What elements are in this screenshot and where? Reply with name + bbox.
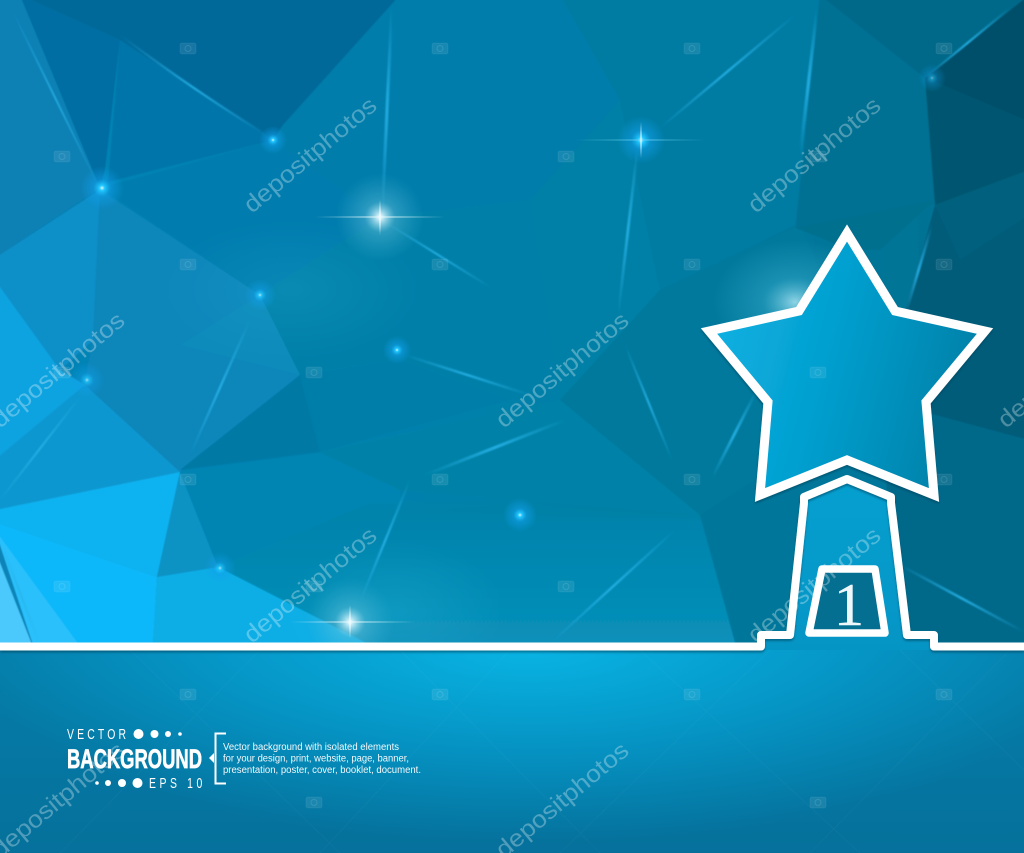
vector label: VECTOR xyxy=(67,726,126,742)
light beams xyxy=(0,8,1024,645)
description: presentation, poster, cover, booklet, document. xyxy=(223,765,421,776)
top dots xyxy=(134,729,182,739)
background heading: BACKGROUND xyxy=(67,744,202,774)
glow behind star xyxy=(713,240,877,364)
watermark text: depositphotos xyxy=(743,522,886,649)
eps label: EPS 10 xyxy=(149,775,202,791)
light glows xyxy=(69,64,946,666)
camera watermark icons xyxy=(54,43,952,808)
bottom band xyxy=(0,648,1024,853)
number plate xyxy=(809,569,885,638)
bracket xyxy=(216,734,226,784)
bracket pointer xyxy=(209,753,214,763)
watermark text: depositphotos xyxy=(743,92,886,219)
watermark text: depositphotos xyxy=(491,307,634,434)
description xyxy=(223,742,421,776)
watermark text: depositphotos xyxy=(239,92,382,219)
polygon background xyxy=(0,0,1024,660)
description: for your design, print, website, page, banner, xyxy=(223,754,409,764)
bottom dots xyxy=(95,778,142,788)
logo block: vector background eps 10 xyxy=(67,726,421,791)
icon: star outline xyxy=(709,233,985,495)
podium body fill xyxy=(761,478,934,650)
number 1: 1 xyxy=(834,572,864,638)
watermark text: depositphotos xyxy=(239,522,382,649)
podium outline and horizon line xyxy=(0,479,1024,646)
description: Vector background with isolated elements xyxy=(223,742,399,753)
